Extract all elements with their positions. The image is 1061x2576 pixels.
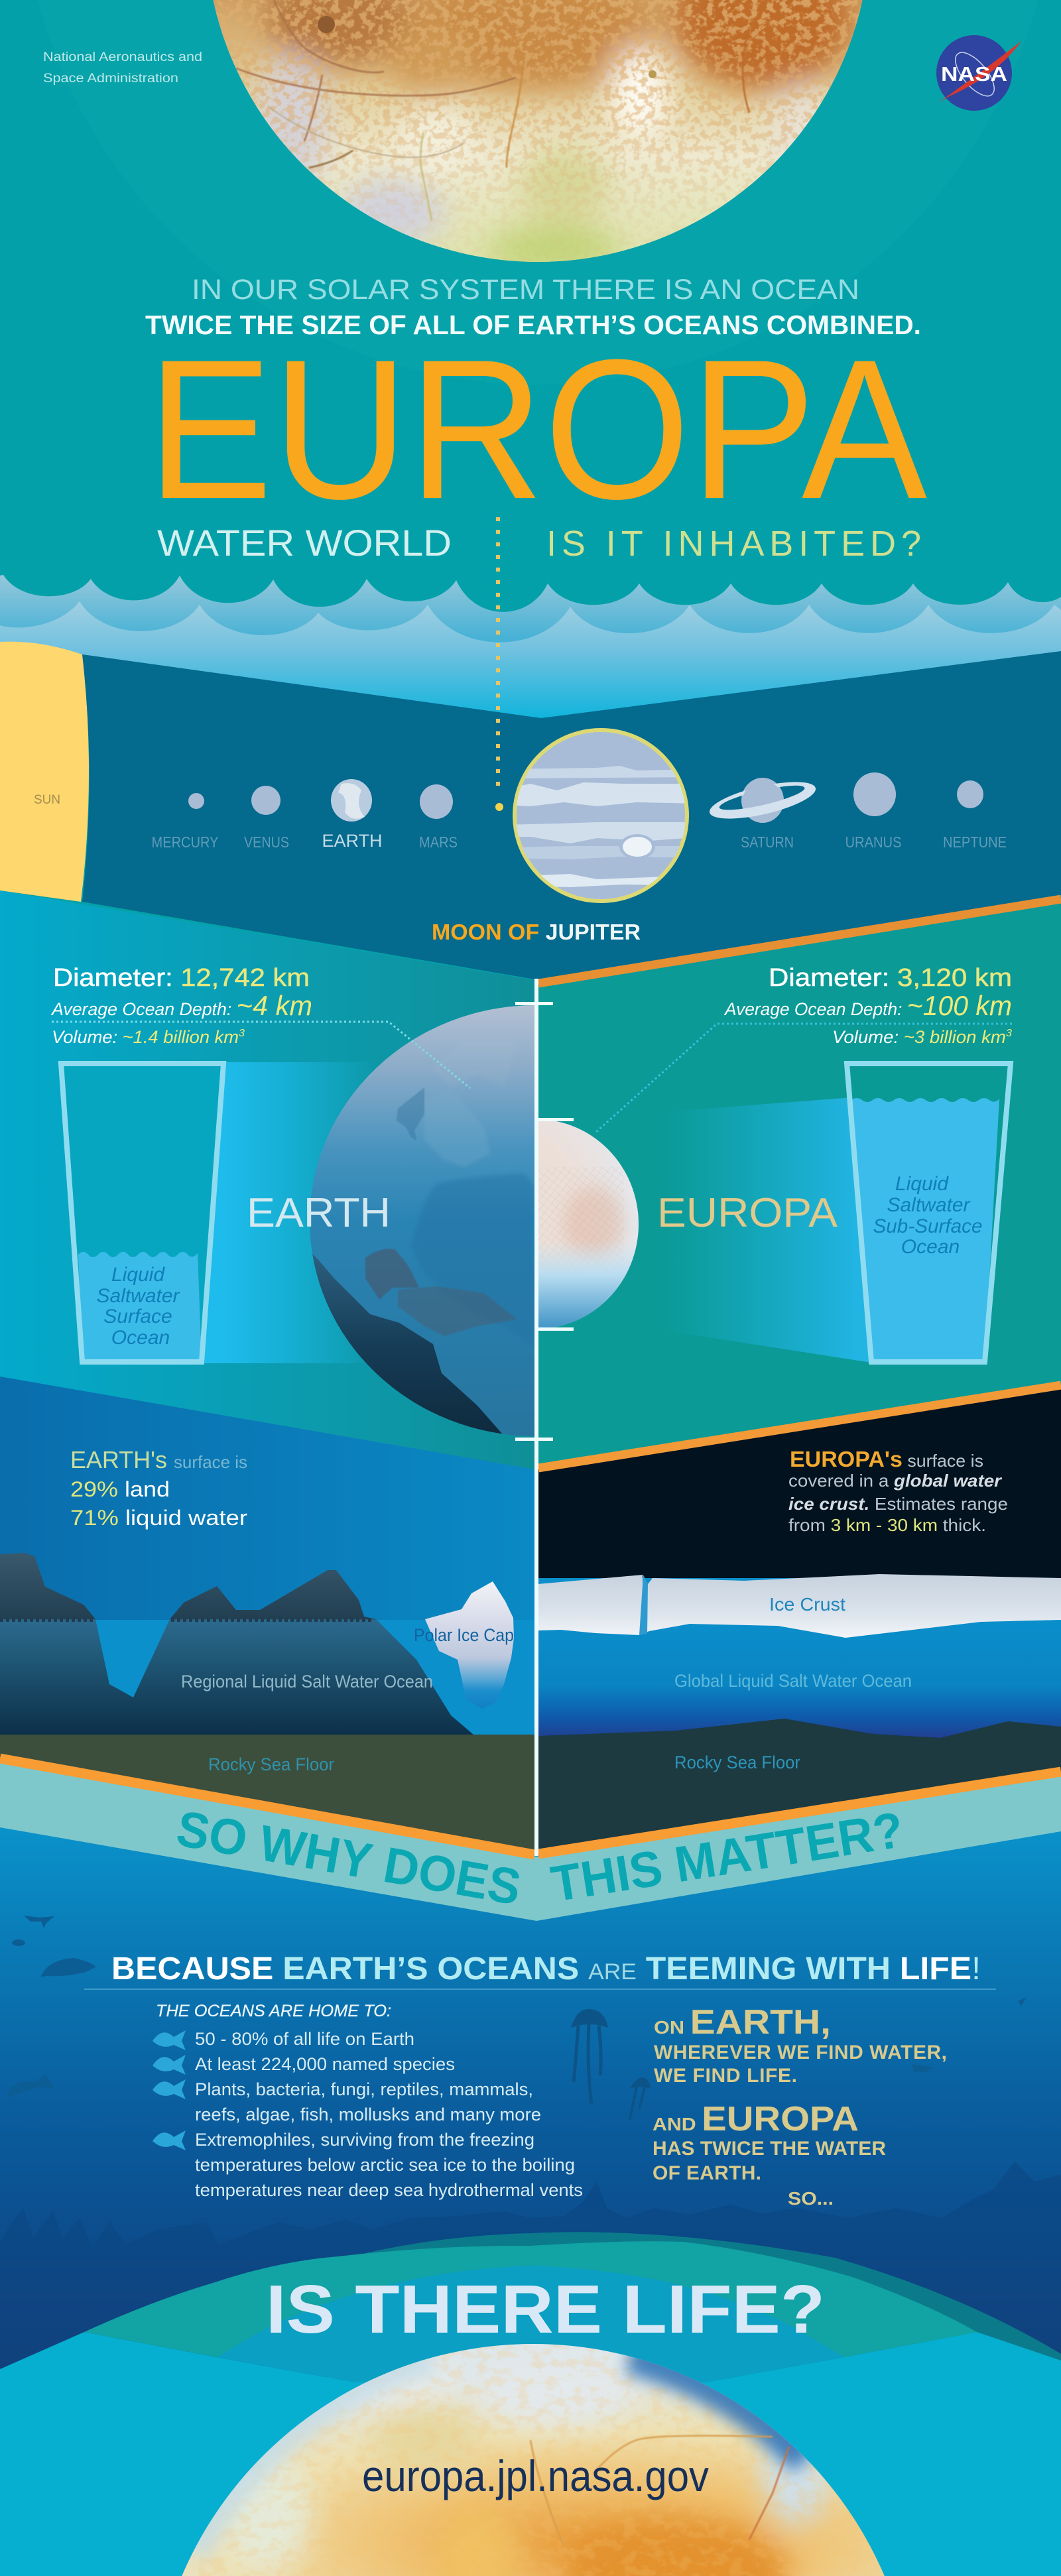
planet labels: MERCURY — [151, 833, 219, 851]
NASA agency name: Space Administration — [43, 72, 178, 86]
heading: is there life: IS THERE LIFE? — [266, 2271, 825, 2347]
title: EUROPA: EUROPA — [147, 318, 928, 540]
jellyfish — [630, 2077, 651, 2120]
pale limb, left — [192, 2358, 431, 2553]
continent: Central America — [398, 1286, 517, 1336]
bullet 1 — [153, 2030, 186, 2050]
bullet 3 — [153, 2079, 186, 2099]
inner blue arc — [217, 2266, 844, 2382]
water label: Sub-Surface — [873, 1215, 983, 1237]
right column statement: HAS TWICE THE WATER — [653, 2138, 886, 2160]
planet: Earth — [331, 779, 372, 822]
Earth surface text: 71% liquid water — [70, 1506, 247, 1530]
label: ice crust: Ice Crust — [769, 1594, 845, 1615]
panel: Earth comparison background — [0, 890, 534, 1479]
bullet 4 — [153, 2130, 186, 2150]
reef silhouette — [0, 2162, 1061, 2367]
continent: North America — [419, 1174, 533, 1233]
water label: Ocean — [901, 1236, 960, 1258]
url: europa.jpl.nasa.gov — [362, 2451, 709, 2500]
subtitle: is it inhabited: IS IT INHABITED? — [546, 524, 921, 564]
rocky sea floor — [0, 1735, 534, 1857]
rocky sea floor — [538, 1719, 1061, 1857]
list text: Extremophiles, surviving from the freezing — [195, 2130, 534, 2150]
Earth surface text: EARTH's surface is — [70, 1446, 247, 1473]
Europa surface text: EUROPA's surface is — [790, 1447, 983, 1471]
planet: Saturn — [706, 774, 819, 826]
planet labels: SATURN — [741, 833, 794, 851]
right column statement: WHEREVER WE FIND WATER, — [654, 2042, 947, 2063]
fish — [12, 1939, 25, 1946]
center axis — [515, 979, 574, 1856]
water label: Saltwater — [887, 1194, 971, 1216]
water label: Saltwater — [96, 1285, 180, 1307]
water label — [96, 1264, 180, 1349]
Earth volume: Volume: ~1.4 billion km — [52, 1027, 237, 1047]
sun: SUN — [34, 793, 60, 807]
panel: Europa comparison background — [538, 896, 1061, 1472]
right column statement — [653, 2003, 947, 2209]
planets — [188, 730, 983, 901]
intro text: TWICE THE SIZE OF ALL OF EARTH’S OCEANS COMBINED. — [145, 310, 921, 340]
NASA agency name: National Aeronautics and — [43, 50, 202, 64]
Europa surface text — [788, 1447, 1008, 1535]
Earth volume: 3 — [239, 1028, 245, 1039]
water label: Liquid — [111, 1264, 165, 1286]
NASA agency name — [43, 50, 202, 86]
Earth surface text: 29% land — [70, 1477, 170, 1501]
teal arc — [84, 2241, 977, 2357]
right column statement: ON EARTH, — [654, 2003, 831, 2042]
continent: North polar land — [431, 1041, 517, 1087]
Earth diameter: Diameter: 12,742 km — [53, 964, 310, 992]
fish — [40, 1958, 96, 1977]
waves — [0, 575, 1061, 729]
banner: So why does this matter — [0, 1758, 1061, 1921]
ice crust — [538, 1574, 1061, 1638]
planet: Neptune — [957, 780, 983, 808]
stats: Europa — [723, 964, 1012, 1047]
intro text: IN OUR SOLAR SYSTEM THERE IS AN OCEAN — [192, 274, 859, 306]
Europa volume: Volume: ~3 billion km — [832, 1027, 1004, 1047]
label: EUROPA: EUROPA — [657, 1190, 838, 1236]
blue limb, upper right — [630, 2357, 806, 2460]
continent: Greenland — [397, 1087, 424, 1140]
glass: Earth ocean — [61, 1064, 223, 1362]
icon: NASA logo: NASA — [941, 62, 1007, 86]
illustration: Earth half globe — [310, 1005, 534, 1436]
list text: temperatures near deep sea hydrothermal vents — [195, 2180, 583, 2200]
water label: Surface — [103, 1306, 172, 1327]
planet labels: URANUS — [845, 833, 902, 851]
label: polar ice cap: Polar Ice Cap — [414, 1625, 514, 1645]
water label — [873, 1173, 983, 1258]
section labels: Europa cross-section — [674, 1447, 1008, 1772]
water below surface — [0, 1620, 534, 1739]
water label: Liquid — [895, 1173, 949, 1195]
Europa surface text: from 3 km - 30 km thick. — [788, 1515, 986, 1535]
label: rocky sea floor: Rocky Sea Floor — [208, 1754, 334, 1774]
planet labels: NEPTUNE — [943, 833, 1007, 851]
planet: Jupiter — [504, 730, 703, 901]
label: regional ocean: Regional Liquid Salt Water Ocean — [181, 1672, 433, 1691]
fish — [1018, 1997, 1027, 2006]
Europa diameter: Diameter: 3,120 km — [769, 964, 1012, 992]
right column statement: WE FIND LIFE. — [654, 2065, 797, 2087]
banner: So why does this matter: THIS MATTER? — [547, 1802, 907, 1913]
list text: Plants, bacteria, fungi, reptiles, mammals, — [195, 2079, 533, 2099]
fish — [912, 2064, 934, 2072]
continent: Mexico — [365, 1249, 419, 1300]
divider — [84, 1989, 996, 1990]
list heading: THE OCEANS ARE HOME TO: — [156, 2002, 391, 2020]
heading: Moon of Jupiter: MOON OF JUPITER — [432, 920, 641, 944]
cyan base — [0, 2332, 1061, 2576]
dotted callout: Europa — [595, 1024, 1012, 1133]
label: rocky sea floor: Rocky Sea Floor — [674, 1752, 800, 1772]
fish — [24, 1916, 54, 1928]
right column statement: SO... — [788, 2188, 834, 2209]
planet labels: MARS — [419, 833, 458, 851]
list text: reefs, algae, fish, mollusks and many more — [195, 2105, 541, 2124]
panel: Earth surface cross-section — [0, 1377, 534, 1857]
background: teal header — [0, 0, 1061, 663]
landmass — [0, 1553, 473, 1735]
continent: Arctic islands — [426, 1123, 489, 1166]
Europa volume: 3 — [1006, 1028, 1012, 1039]
Europa depth: Average Ocean Depth: ~100 km — [723, 990, 1012, 1021]
intro text — [145, 274, 921, 340]
illustration: Europa half globe — [538, 1121, 639, 1327]
list text: 50 - 80% of all life on Earth — [195, 2029, 414, 2049]
planet labels: EARTH — [322, 831, 382, 851]
right column statement: OF EARTH. — [653, 2162, 761, 2184]
halo around Europa — [21, 0, 1055, 385]
fish bullets — [153, 2030, 186, 2150]
planet labels: VENUS — [244, 833, 289, 851]
Europa surface text: ice crust. Estimates range — [788, 1494, 1008, 1514]
planet: Mercury — [188, 793, 204, 809]
icon: NASA logo — [936, 35, 1021, 111]
Earth depth: Average Ocean Depth: ~4 km — [50, 990, 312, 1021]
label: global ocean: Global Liquid Salt Water Ocean — [674, 1671, 912, 1691]
bullet 2 — [153, 2055, 186, 2075]
sea life silhouettes — [7, 1916, 1027, 2120]
heading: because: BECAUSE EARTH’S OCEANS ARE TEEMING WITH LIFE! — [111, 1951, 981, 1987]
planet: Uranus — [853, 772, 896, 816]
dotted callout: Earth — [52, 1022, 470, 1088]
outer dark teal arc — [298, 2232, 1061, 2400]
Europa surface text: covered in a global water — [788, 1471, 1003, 1491]
ice crack — [639, 1575, 648, 1635]
label: EARTH: EARTH — [247, 1190, 391, 1236]
water label: Ocean — [111, 1327, 170, 1349]
subtitle: water world: WATER WORLD — [157, 522, 452, 564]
beam from Europa glass — [637, 1097, 875, 1363]
planet labels — [151, 831, 1007, 851]
sun — [0, 642, 89, 902]
illustration: Europa moon (top) — [199, 0, 889, 272]
panel: below fold deep ocean — [0, 1750, 1061, 2377]
list text — [195, 2029, 583, 2200]
Earth surface text — [70, 1446, 247, 1530]
dark crescent — [312, 1254, 503, 1434]
footer atmosphere layers — [0, 2232, 1061, 2576]
right column statement: AND EUROPA — [653, 2100, 859, 2138]
beam from Earth glass — [200, 1062, 411, 1363]
jellyfish — [571, 2009, 608, 2104]
illustration: Europa moon (bottom) — [182, 2344, 885, 2576]
fish — [7, 2074, 54, 2097]
glass: Europa ocean — [847, 1064, 1011, 1362]
list text: At least 224,000 named species — [195, 2054, 455, 2074]
planet: Venus — [251, 786, 281, 815]
dotted connector: title to Jupiter — [495, 517, 503, 811]
orange edge, top — [538, 1385, 1061, 1468]
planet: Mars — [420, 784, 453, 819]
stats: Earth — [50, 964, 312, 1047]
orange divider, top right — [538, 899, 1061, 983]
panel: solar system band — [82, 651, 1061, 980]
section labels: Earth cross-section — [70, 1446, 514, 1774]
banner: So why does this matter: SO WHY DOES — [172, 1800, 525, 1916]
iceberg — [425, 1581, 514, 1709]
panel: Europa surface cross-section — [538, 1385, 1061, 1857]
list text: temperatures below arctic sea ice to the boiling — [195, 2155, 575, 2175]
shoreline ripples — [0, 1618, 371, 1622]
